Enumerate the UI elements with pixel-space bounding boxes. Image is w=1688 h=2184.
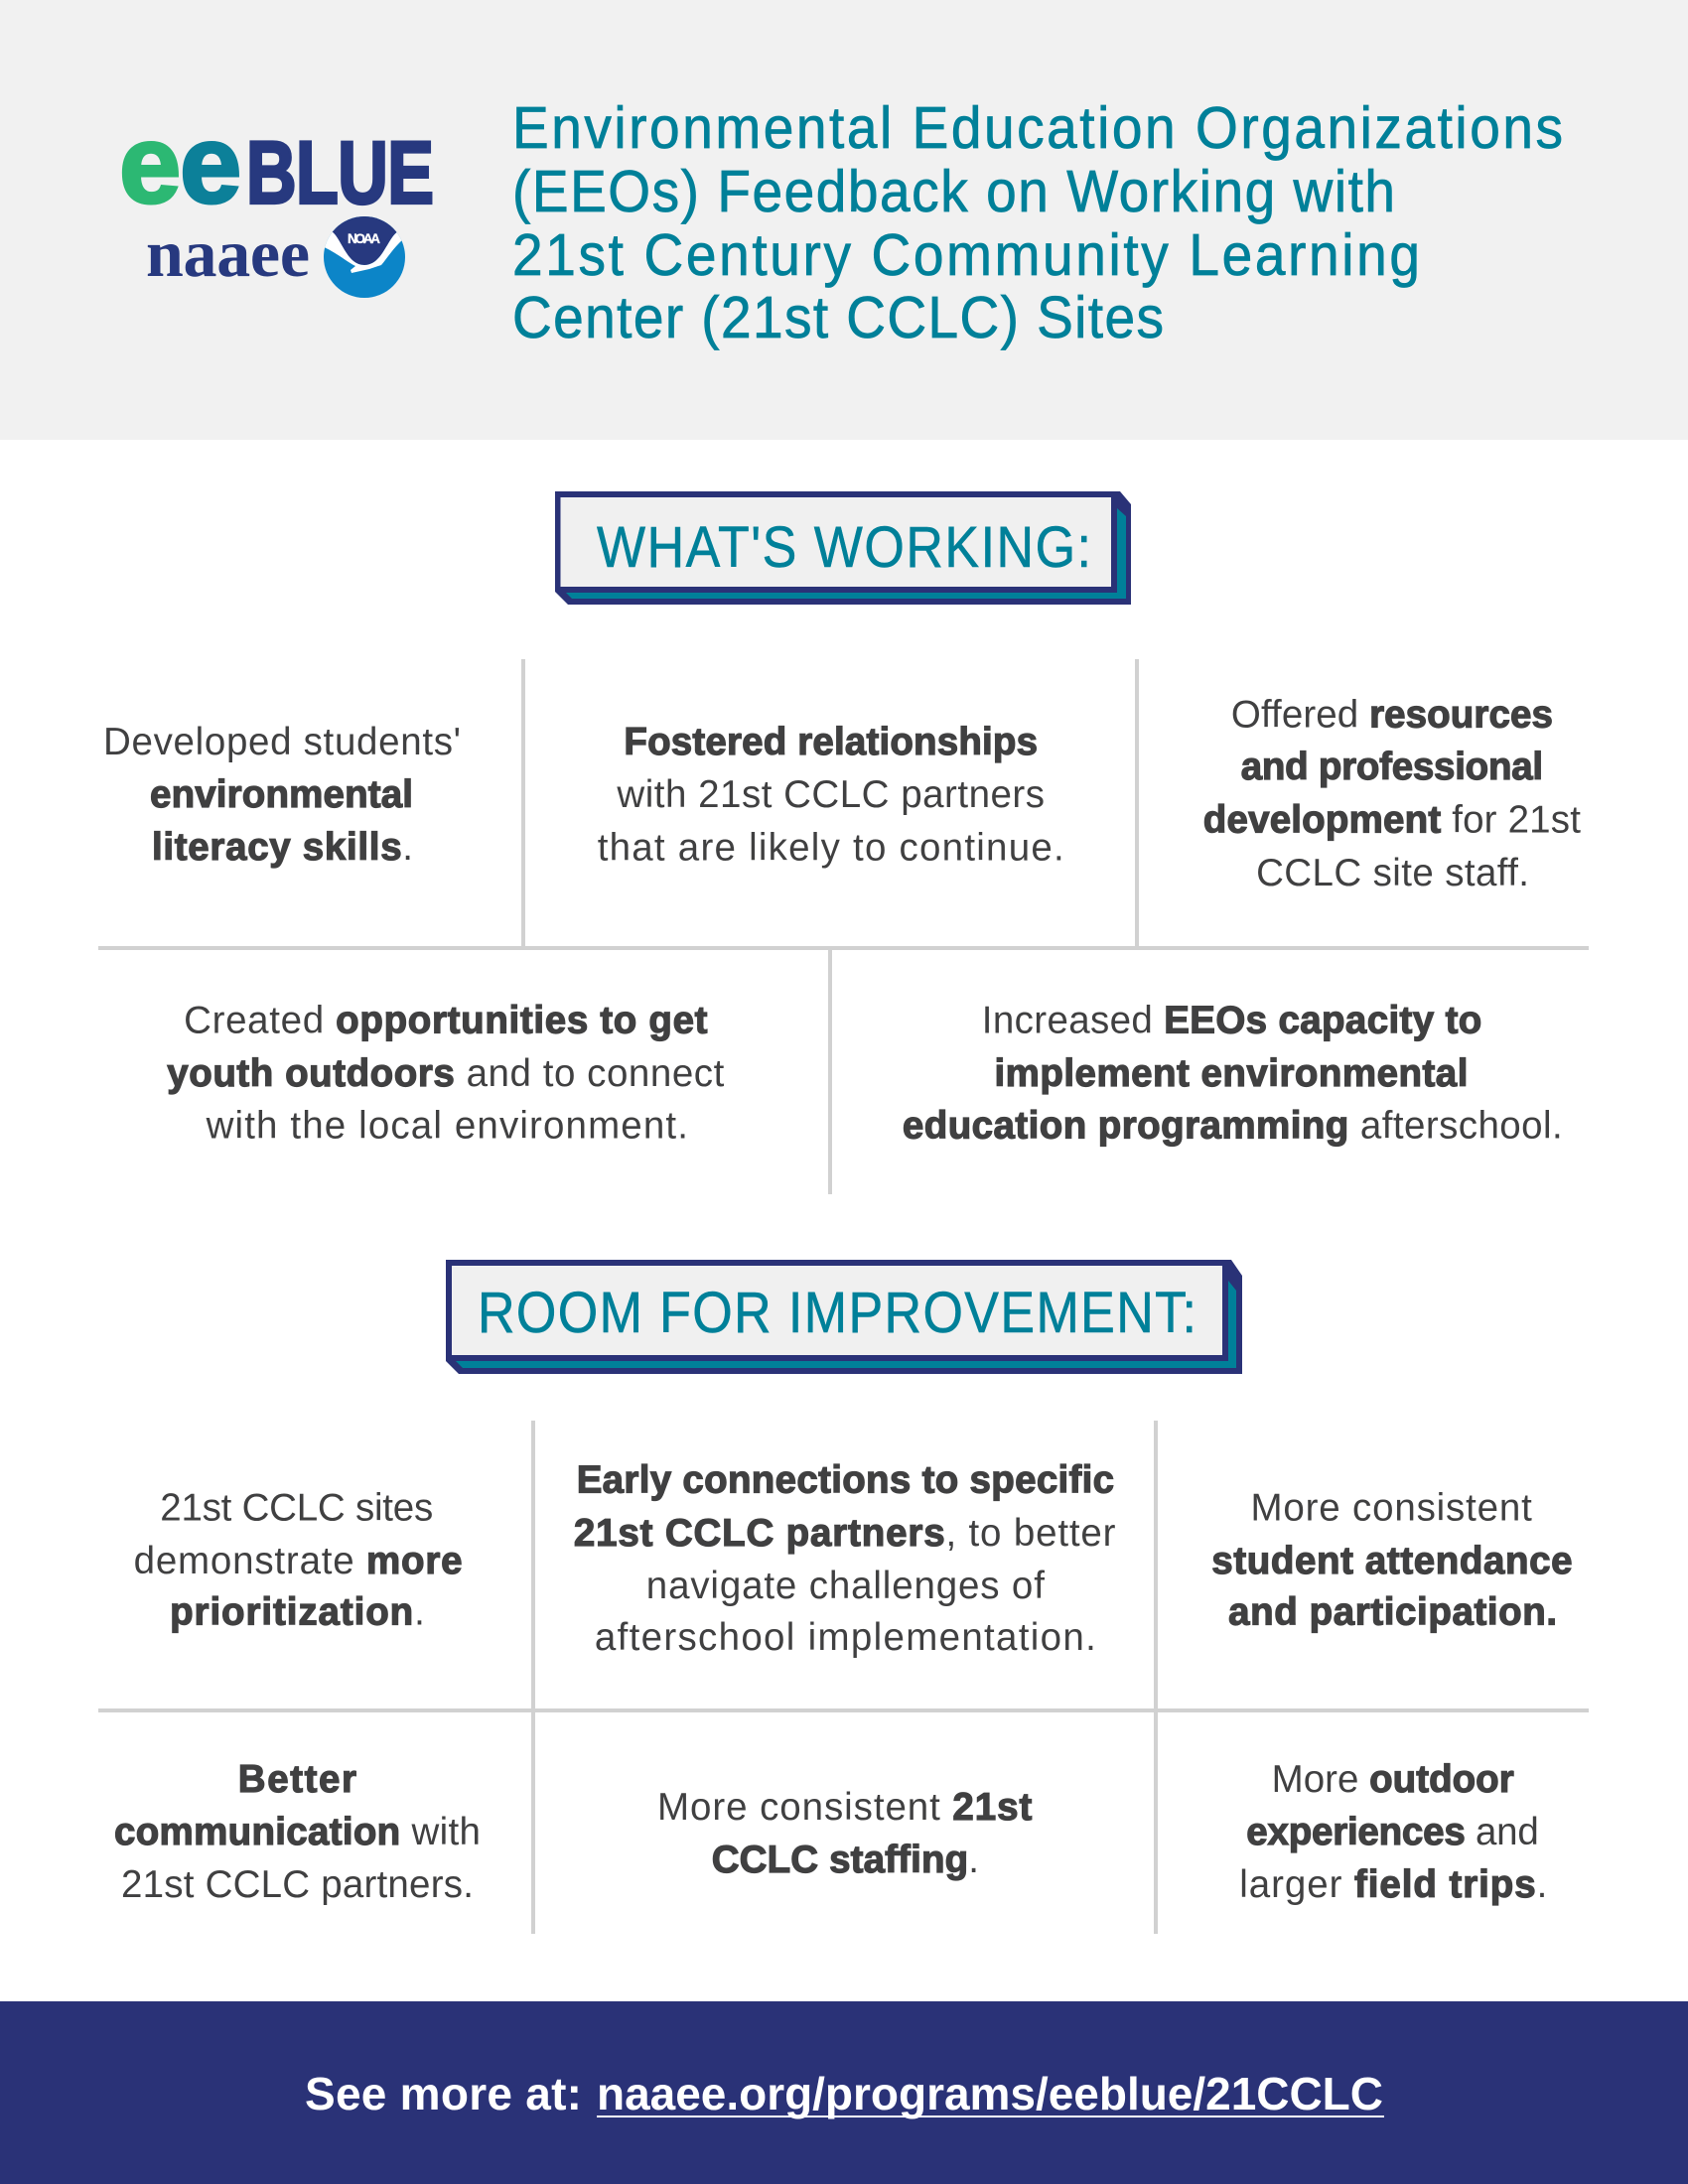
item: early connections: Early connections to specific — [577, 1459, 1114, 1501]
heading: Room for improvement: ROOM FOR IMPROVEMENT: — [478, 1280, 1196, 1345]
heading: What's working: WHAT'S WORKING: — [597, 514, 1091, 580]
title: (EEOs) Feedback on Working with — [512, 159, 1395, 224]
item: fostered relationships — [598, 721, 1064, 870]
logo: naaee: naaee — [146, 215, 310, 291]
item: environmental literacy: literacy skills. — [152, 826, 413, 869]
icon: NOAA seal — [324, 216, 405, 298]
title: 21st Century Community Learning — [512, 222, 1420, 288]
heading: What's working — [555, 491, 1131, 605]
footer link text: naaee.org/programs/eeblue/21CCLC — [597, 2068, 1383, 2119]
item: outdoor experiences: larger field trips. — [1239, 1863, 1547, 1906]
item: environmental literacy: environmental — [150, 773, 413, 816]
header band — [0, 0, 1688, 440]
title: Environmental Education Organizations — [512, 95, 1563, 161]
item: prioritization: prioritization. — [170, 1591, 425, 1634]
title — [512, 95, 1563, 350]
item: better communication — [114, 1758, 481, 1906]
item: attendance and participation: student attendance — [1211, 1540, 1573, 1582]
item: resources and professional development — [1203, 693, 1581, 894]
item: opportunities outdoors — [167, 1000, 725, 1147]
panel: room for improvement grid — [98, 1421, 1589, 1934]
item: attendance and participation — [1211, 1487, 1573, 1634]
title: Center (21st CCLC) Sites — [512, 285, 1164, 350]
item: environmental literacy: Developed students' — [103, 721, 461, 763]
item: better communication: communication with — [114, 1811, 481, 1853]
item: EEO capacity: implement environmental — [995, 1052, 1468, 1095]
item: EEO capacity — [903, 1000, 1563, 1147]
item: consistent staffing — [657, 1786, 1032, 1881]
item: consistent staffing: More consistent 21st — [657, 1786, 1032, 1829]
item: prioritization: 21st CCLC sites — [160, 1487, 433, 1529]
item: resources and professional development: Offered resources — [1231, 693, 1553, 737]
icon: NOAA seal: NOAA — [348, 230, 380, 246]
item: attendance and participation: and participation. — [1228, 1591, 1557, 1634]
item: outdoor experiences: More outdoor — [1272, 1758, 1514, 1801]
logo: eeBLUE: e — [180, 102, 241, 226]
item: opportunities outdoors: with the local environment. — [206, 1104, 688, 1147]
item: resources and professional development: and professional — [1241, 746, 1543, 788]
item: early connections: afterschool implementation. — [595, 1616, 1096, 1659]
item: early connections — [574, 1459, 1116, 1659]
item: resources and professional development: CCLC site staff. — [1256, 852, 1529, 894]
item: better communication: 21st CCLC partners. — [121, 1863, 474, 1906]
item: EEO capacity: education programming afterschool. — [903, 1104, 1563, 1147]
item: resources and professional development: development for 21st — [1203, 799, 1581, 842]
item: EEO capacity: Increased EEOs capacity to — [982, 1000, 1481, 1042]
item: prioritization — [134, 1487, 463, 1634]
item: prioritization: demonstrate more — [134, 1540, 463, 1582]
heading: Room for improvement — [446, 1260, 1242, 1374]
item: early connections: navigate challenges of — [646, 1565, 1045, 1607]
item: fostered relationships: Fostered relationships — [624, 721, 1038, 763]
footer band — [0, 2001, 1688, 2184]
item: early connections: 21st CCLC partners, to better — [574, 1512, 1116, 1555]
logo: eeBLUE: BLUE — [246, 124, 434, 221]
footer link text: See more at: — [305, 2068, 582, 2119]
item: outdoor experiences: experiences and — [1246, 1811, 1539, 1853]
item: opportunities outdoors: Created opportunities to get — [184, 1000, 708, 1042]
panel: what's working grid — [98, 659, 1589, 1194]
item: fostered relationships: with 21st CCLC partners — [616, 773, 1045, 816]
item: attendance and participation: More consistent — [1251, 1487, 1532, 1529]
item: consistent staffing: CCLC staffing. — [712, 1839, 979, 1881]
item: outdoor experiences — [1239, 1758, 1547, 1906]
item: environmental literacy — [103, 721, 461, 869]
logo: eeBLUE: e — [119, 102, 181, 226]
logo: eeBLUE — [119, 102, 434, 226]
item: fostered relationships: that are likely to continue. — [598, 827, 1064, 870]
item: better communication: Better — [238, 1758, 356, 1801]
item: opportunities outdoors: youth outdoors and to connect — [167, 1052, 725, 1095]
